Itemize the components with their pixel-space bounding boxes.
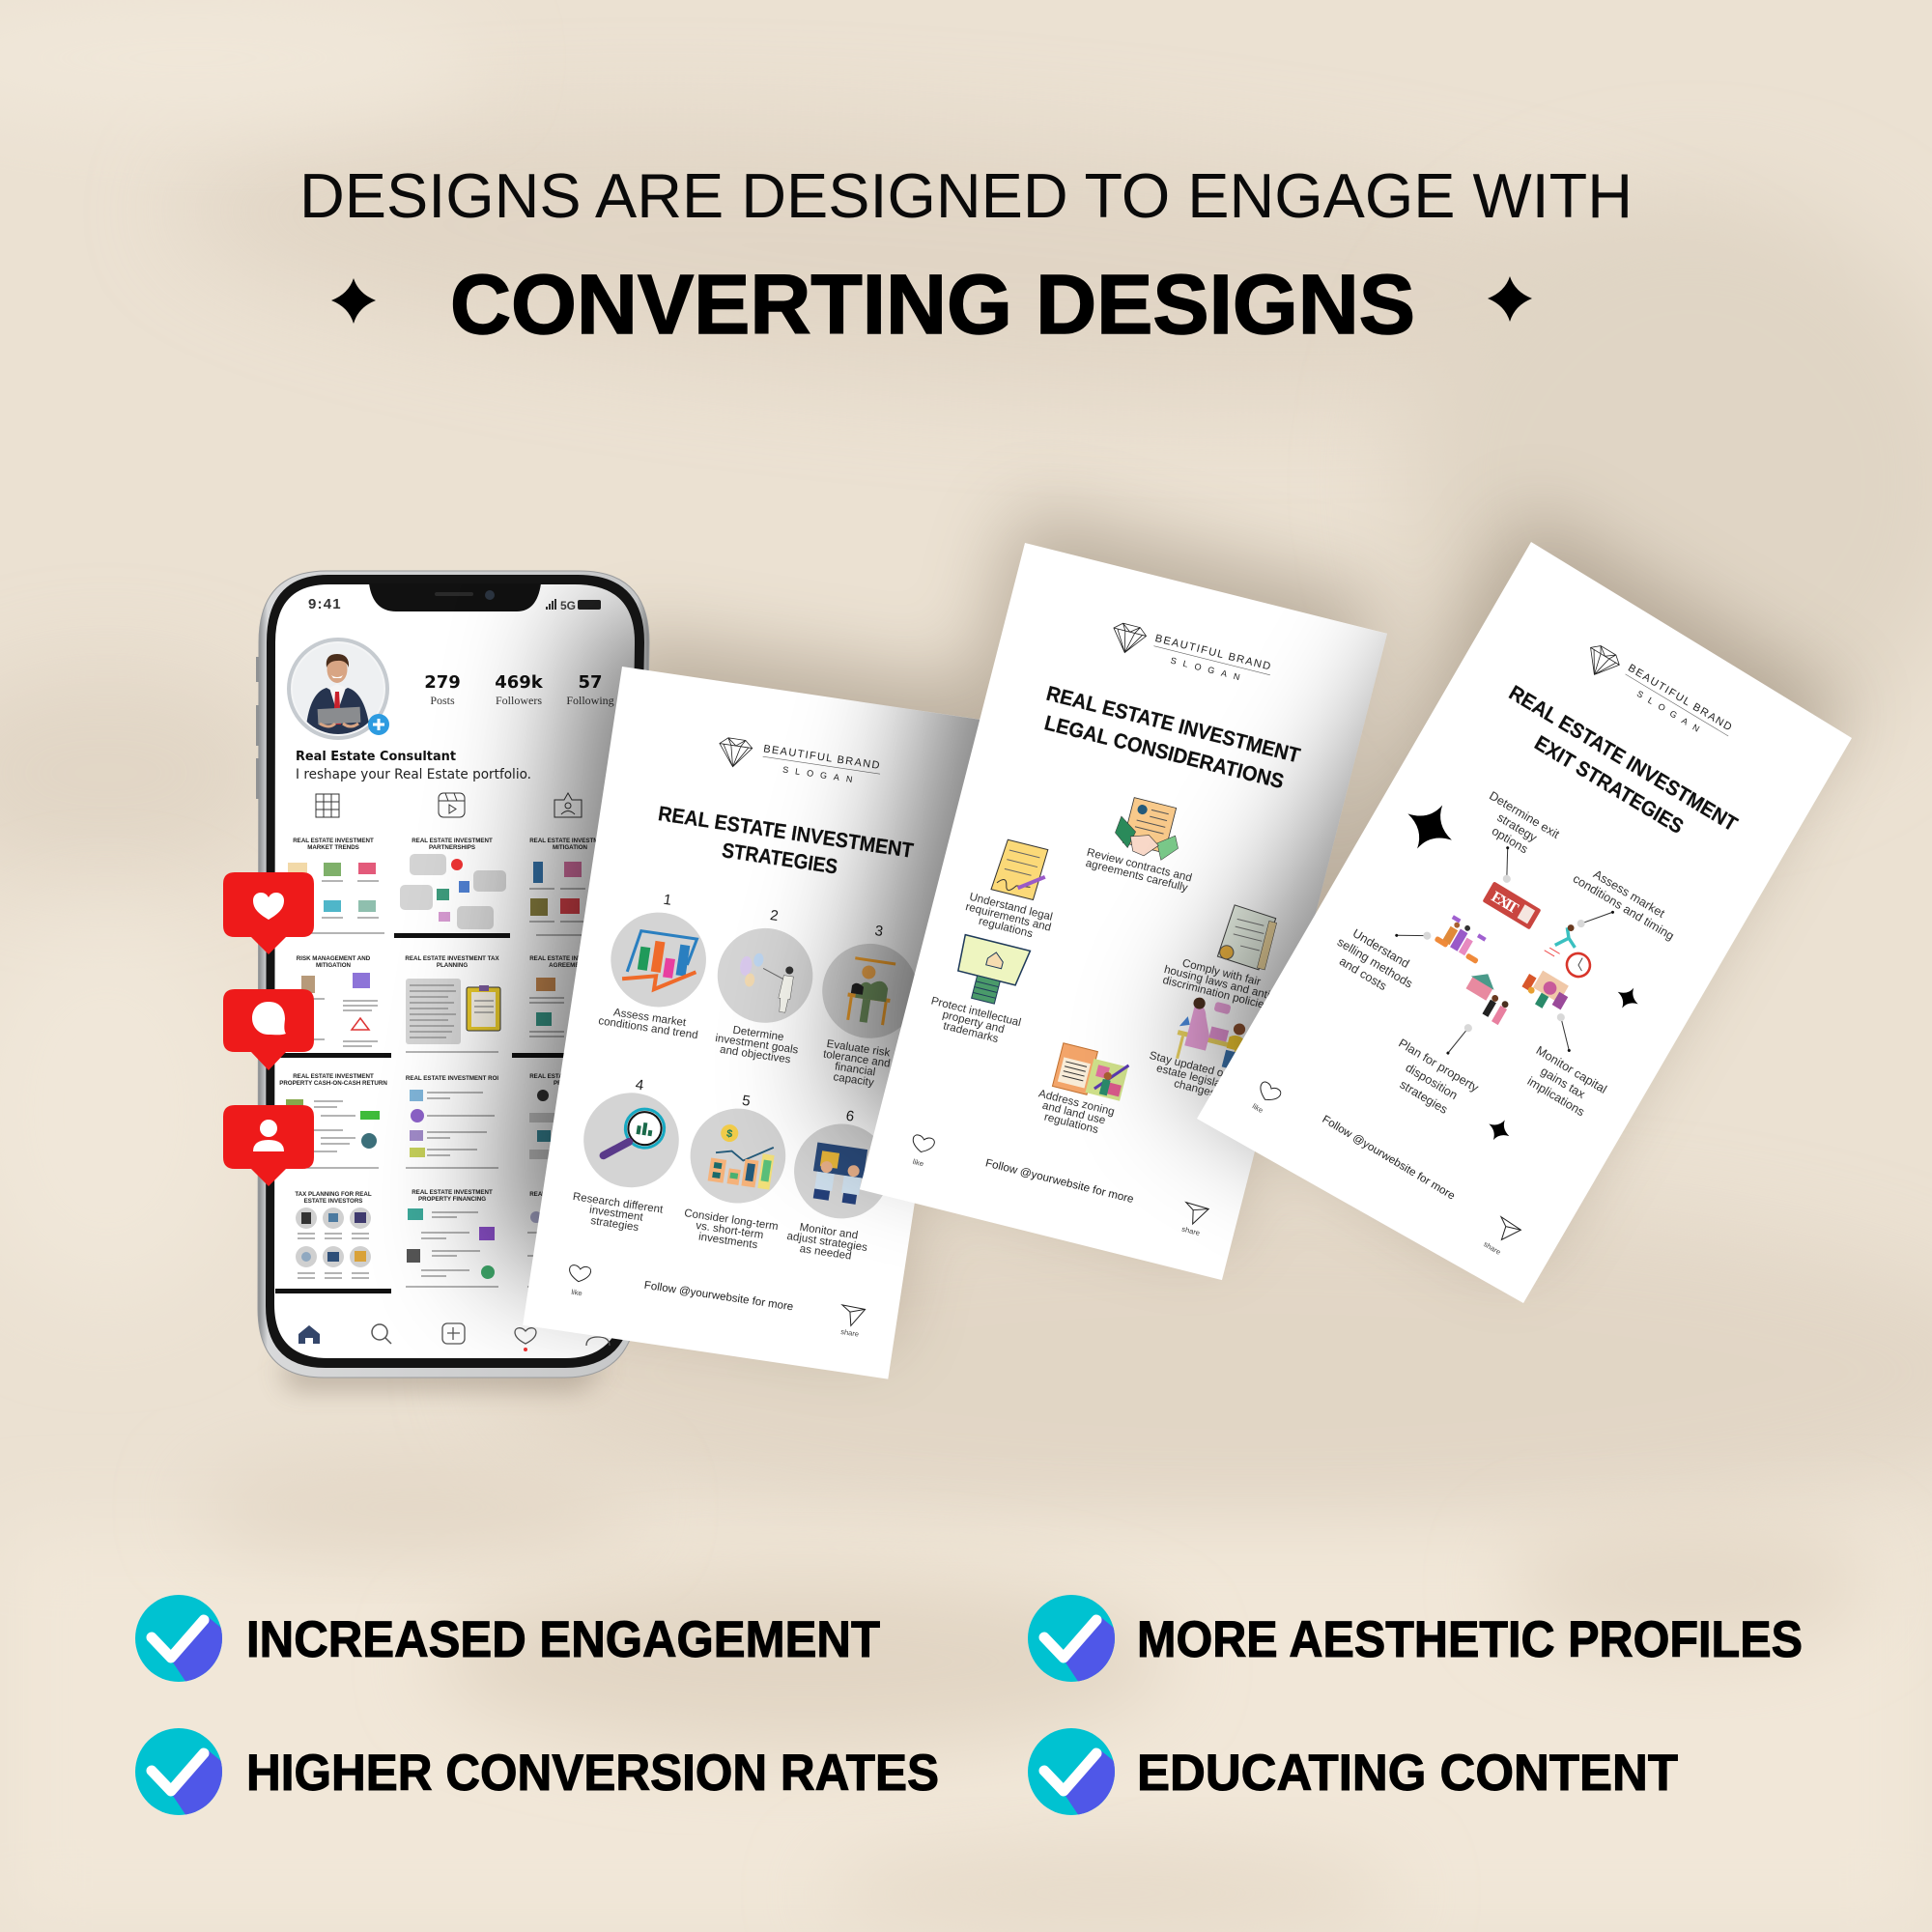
post row 2: PLANNING (437, 962, 468, 969)
step 5: 5 (741, 1093, 752, 1110)
card title (653, 801, 915, 889)
item: protect trademarks: property and (941, 1009, 1006, 1036)
item: fair housing: Comply with fair (1181, 956, 1263, 988)
card title: STRATEGIES (721, 838, 839, 879)
footer (907, 1134, 1209, 1238)
item: legal requirements (961, 834, 1069, 944)
item: review contracts (1083, 790, 1208, 895)
status bar: 9:41 (308, 596, 342, 612)
profile stats: 57 (578, 672, 603, 693)
post row 2: RISK MANAGEMENT AND (297, 955, 371, 962)
heading line: DESIGNS ARE DESIGNED TO ENGAGE WITH (299, 160, 1633, 231)
card title: REAL ESTATE INVESTMENT (657, 801, 915, 863)
card title: REAL ESTATE INVESTMENT (1044, 681, 1303, 768)
item: review contracts: agreements carefully (1084, 857, 1189, 895)
label: exit options (1457, 789, 1562, 895)
step 6: 6 (845, 1108, 855, 1125)
label: disposition: strategies (1398, 1077, 1450, 1117)
post row 3: REAL ESTATE INVESTMENT (293, 1073, 374, 1080)
sparkle left (331, 278, 376, 324)
step 2: investment goals (715, 1033, 799, 1057)
step 1 (598, 885, 719, 1041)
profile stats: Following (566, 694, 614, 707)
item: protect trademarks: trademarks (942, 1019, 1000, 1045)
label: selling methods: Understand (1350, 926, 1411, 971)
post row 4: REAL ESTATE INVESTMENT (529, 1191, 611, 1198)
status bar (308, 596, 601, 612)
benefit: more aesthetic profiles: MORE AESTHETIC PROFILES (1137, 1611, 1803, 1668)
step 4 (569, 1070, 688, 1237)
label: disposition (1378, 998, 1504, 1125)
step 5: investments (697, 1232, 758, 1251)
icon: sellers (1435, 913, 1492, 965)
step 3: financial (834, 1061, 876, 1078)
item: legislation: estate legislation (1155, 1062, 1239, 1094)
label: market timing: conditions and timing (1571, 872, 1676, 943)
step 1: 1 (663, 892, 672, 909)
phone body (258, 571, 649, 1378)
step 3: 3 (873, 923, 884, 940)
brand logo: BEAUTIFUL BRAND (762, 743, 883, 772)
footer (566, 1264, 866, 1339)
icon: house handover (1457, 967, 1518, 1025)
profile stats: Posts (430, 694, 455, 707)
item: legislation: Stay updated on real (1148, 1049, 1252, 1087)
step 1: conditions and trend (598, 1015, 698, 1041)
step 6: Monitor and (799, 1222, 859, 1241)
footer: Follow @yourwebsite for more (984, 1156, 1135, 1206)
post row 4 (275, 1189, 611, 1293)
card 3: exit strategies (1240, 602, 1797, 1263)
post row 4: REAL ESTATE INVESTMENT (412, 1189, 493, 1196)
post row 1: REAL ESTATE INVESTMENT (293, 838, 374, 844)
post row 4: TAX PLANNING FOR REAL (295, 1191, 372, 1198)
item: zoning: regulations (1043, 1111, 1100, 1136)
sparkle large (1395, 792, 1464, 862)
label: selling methods: and costs (1337, 954, 1389, 993)
sparkle small (1483, 1114, 1515, 1146)
step 1: Assess market (612, 1007, 688, 1029)
item: fair housing: discrimination policies (1161, 974, 1271, 1012)
item: fair housing (1160, 893, 1293, 1012)
footer: like (1251, 1101, 1264, 1115)
phone mockup (256, 571, 649, 1387)
brand logo (1580, 640, 1736, 751)
post row 2 (275, 955, 618, 1058)
phone screen (274, 584, 635, 1358)
step 4: 4 (635, 1076, 644, 1094)
step 3: tolerance and (822, 1049, 891, 1070)
card 2 shadow on card 1 (767, 699, 980, 1218)
footer: Follow @yourwebsite for more (1320, 1113, 1457, 1203)
item: legislation (1143, 989, 1267, 1107)
card 2: legal considerations (860, 543, 1387, 1280)
sparkle medium (1612, 981, 1644, 1014)
post row 2: AGREEMENTS (549, 962, 591, 969)
add badge (368, 714, 389, 735)
post row 1: REAL ESTATE INVESTMENT (412, 838, 493, 844)
card title: LEGAL CONSIDERATIONS (1042, 710, 1287, 793)
step 6: as needed (799, 1243, 852, 1263)
card title: EXIT STRATEGIES (1530, 730, 1688, 838)
label: exit options: strategy (1495, 810, 1540, 845)
item: fair housing: housing laws and anti- (1163, 963, 1275, 1003)
post row 3: REAL ESTATE INVESTMENT ROI (406, 1075, 498, 1082)
step 3: Evaluate risk (826, 1038, 891, 1059)
profile bio: I reshape your Real Estate portfolio. (296, 767, 531, 782)
post row 2: REAL ESTATE INVESTMENT (529, 955, 611, 962)
brand logo: BEAUTIFUL BRAND (1626, 663, 1736, 735)
phone shadow (280, 1364, 609, 1387)
benefit: higher conversion rates: HIGHER CONVERSION RATES (246, 1745, 939, 1802)
item: legal requirements: requirements and (964, 900, 1053, 934)
notification: heart (223, 872, 314, 954)
item: zoning (1032, 1040, 1130, 1139)
profile stats: 469k (495, 672, 544, 693)
step 5 (677, 1086, 797, 1254)
footer: share (1180, 1225, 1201, 1237)
icon: exit sign: EXIT (1489, 889, 1521, 918)
post row 3: PROPERTY CASH-ON-CASH RETURN (279, 1080, 387, 1087)
label: exit options: Determine exit (1487, 789, 1562, 841)
post row 1: REAL ESTATE INVESTMENT (529, 838, 611, 844)
sparkle right (1488, 276, 1532, 322)
benefit: more aesthetic profiles (1028, 1595, 1803, 1686)
post row 2: MITIGATION (316, 962, 352, 969)
label: capital gains: Monitor capital (1534, 1043, 1609, 1096)
brand logo: SLOGAN (1170, 656, 1248, 684)
card 1 shadow on phone (418, 584, 635, 1358)
icon: runner and clock (1541, 919, 1605, 981)
side buttons (256, 657, 259, 799)
footer: like (571, 1288, 582, 1297)
label: disposition: Plan for property (1396, 1037, 1482, 1095)
post row 4: ESTATE INVESTORS (304, 1198, 362, 1205)
benefit: educating content: EDUCATING CONTENT (1137, 1745, 1678, 1802)
item: review contracts: Review contracts and (1086, 846, 1193, 884)
step 5: $ (725, 1128, 733, 1140)
profile stats: 279 (424, 672, 461, 693)
post grid (275, 838, 618, 1293)
notification: comment (223, 989, 314, 1070)
post row 1: MITIGATION (553, 844, 588, 851)
label: market timing (1554, 860, 1684, 972)
step 5: vs. short-term (695, 1220, 764, 1241)
benefit: increased engagement: INCREASED ENGAGEMENT (246, 1611, 880, 1668)
card 1: strategies (523, 667, 987, 1379)
post row 3 (279, 1073, 611, 1168)
item: legal requirements: Understand legal (968, 891, 1054, 923)
post row 3: REAL ESTATE INVESTMENT (529, 1073, 611, 1080)
notification: follower (223, 1105, 314, 1186)
post row 1: PARTNERSHIPS (429, 844, 475, 851)
step 4: strategies (590, 1215, 639, 1234)
soft cast shadow of the mockups on the background (518, 508, 1847, 1346)
item: zoning: and land use (1041, 1099, 1107, 1127)
footer: like (912, 1157, 924, 1168)
post row 3: PROPERTY (554, 1080, 587, 1087)
post row 4: PROPERTY FINANCING (418, 1196, 486, 1203)
benefit: educating content (1028, 1728, 1678, 1819)
post row 2: REAL ESTATE INVESTMENT TAX (405, 955, 499, 962)
card 3 shadow on card 2 (1126, 622, 1387, 1204)
profile name: Real Estate Consultant (296, 750, 456, 764)
profile stats: Followers (496, 694, 542, 707)
card title: REAL ESTATE INVESTMENT (1505, 680, 1743, 837)
step 4: investment (588, 1205, 644, 1224)
step 6: adjust strategies (786, 1231, 868, 1254)
label: market timing: Assess market (1591, 867, 1667, 921)
brand logo: SLOGAN (782, 764, 860, 785)
label: capital gains (1519, 1011, 1628, 1123)
label: selling methods: selling methods (1335, 935, 1415, 991)
profile tabs (316, 793, 582, 817)
step 6 (781, 1101, 898, 1266)
benefit: higher conversion rates (135, 1728, 939, 1819)
item: protect trademarks: Protect intellectual (930, 995, 1022, 1029)
item: zoning: Address zoning (1037, 1087, 1116, 1119)
step 2: and objectives (719, 1044, 791, 1065)
benefit: increased engagement (135, 1595, 880, 1686)
footer: share (840, 1327, 860, 1339)
step 2 (705, 901, 822, 1067)
label: selling methods (1327, 895, 1438, 1004)
label: capital gains: implications (1525, 1074, 1587, 1119)
brand logo: BEAUTIFUL BRAND (1153, 633, 1274, 673)
status bar: 5G (560, 599, 576, 612)
profile stats (424, 672, 614, 707)
step 5: Consider long-term (683, 1208, 779, 1233)
brand logo: SLOGAN (1635, 689, 1707, 737)
step 2: 2 (769, 907, 780, 924)
notch (369, 583, 541, 611)
main title: CONVERTING DESIGNS (450, 258, 1415, 352)
label: capital gains: gains tax (1539, 1065, 1588, 1101)
icon: exit sign (1483, 881, 1541, 930)
step 4: Research different (572, 1191, 665, 1216)
phone navigation bar (298, 1323, 610, 1351)
item: legislation: changes (1173, 1077, 1217, 1099)
footer (1248, 1075, 1521, 1261)
label: disposition: disposition (1404, 1061, 1460, 1102)
footer: share (1482, 1239, 1502, 1257)
icon: tax group (1518, 965, 1573, 1017)
brand logo (1108, 621, 1274, 689)
footer: Follow @yourwebsite for more (643, 1280, 794, 1313)
step 3: capacity (833, 1071, 875, 1089)
brand logo (717, 737, 883, 788)
post row 1 (280, 838, 611, 938)
post row 1: MARKET TRENDS (307, 844, 359, 851)
step 3 (809, 917, 927, 1094)
label: exit options: options (1490, 824, 1530, 856)
card 3 sheet (1197, 542, 1852, 1303)
step 2: Determine (732, 1025, 784, 1043)
profile avatar (289, 639, 389, 739)
item: legal requirements: regulations (978, 915, 1035, 940)
item: protect trademarks (924, 930, 1038, 1050)
